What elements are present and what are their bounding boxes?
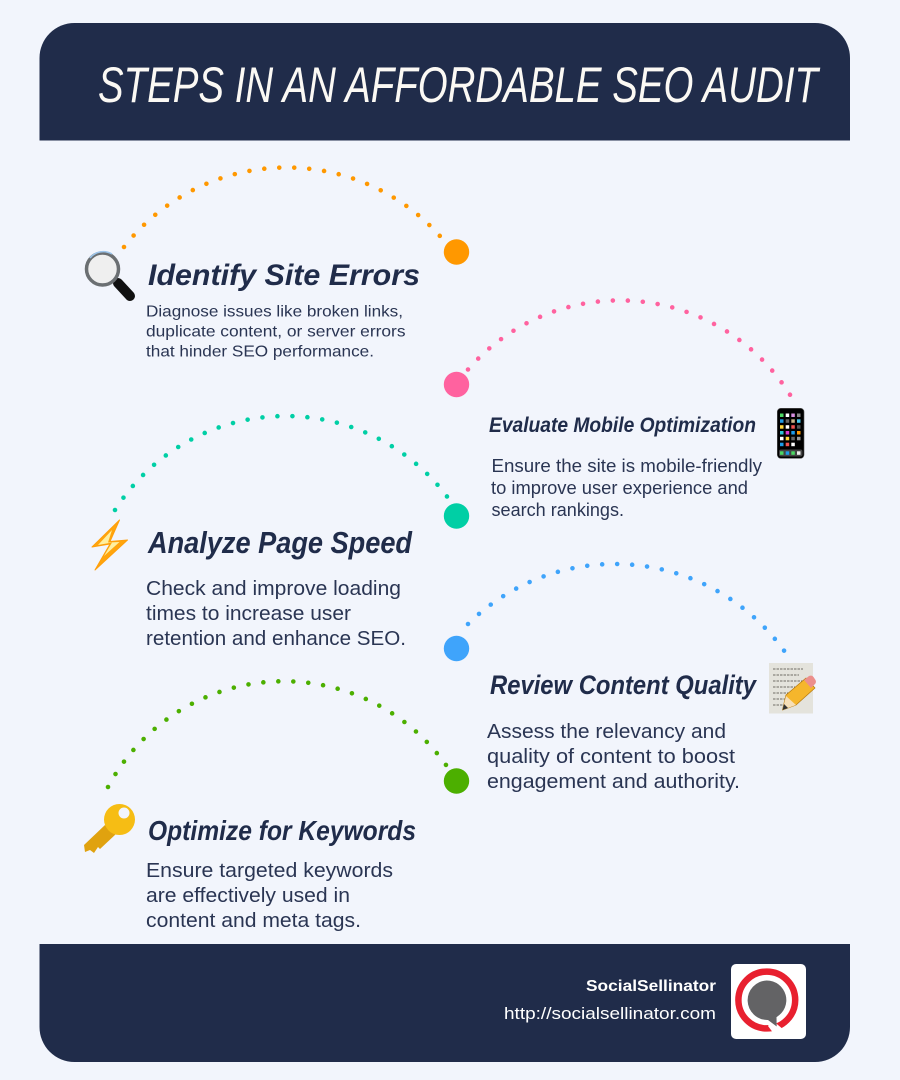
- logo: [731, 964, 806, 1039]
- footer banner: [40, 944, 850, 1062]
- heading: Identify Site Errors: [148, 259, 420, 292]
- description: Diagnose issues like broken links,: [146, 304, 403, 320]
- description: that hinder SEO performance.: [146, 344, 374, 360]
- step 1: identify site errors: [86, 168, 469, 360]
- node: green: [444, 768, 469, 794]
- node: orange: [444, 239, 469, 265]
- header banner: [40, 23, 850, 140]
- step 3: analyze page speed: [92, 416, 469, 650]
- description: [146, 577, 406, 650]
- description: [487, 721, 740, 793]
- icon: memo and pencil: [769, 663, 816, 714]
- description: Assess the relevancy and: [487, 721, 726, 743]
- dotted arc: green: [108, 681, 446, 787]
- description: Ensure the site is mobile-friendly: [492, 456, 762, 476]
- node: teal: [444, 503, 469, 529]
- description: [146, 304, 406, 360]
- description: to improve user experience and: [491, 478, 748, 498]
- heading: Review Content Quality: [490, 670, 758, 700]
- brand name: SocialSellinator: [586, 978, 716, 995]
- icon: lightning bolt: [92, 520, 128, 570]
- icon: smartphone: [777, 408, 804, 458]
- dotted arc: teal: [115, 416, 451, 510]
- description: quality of content to boost: [487, 746, 735, 768]
- description: are effectively used in: [146, 885, 350, 907]
- description: duplicate content, or server errors: [146, 324, 406, 340]
- description: Ensure targeted keywords: [146, 860, 393, 882]
- description: search rankings.: [492, 500, 624, 520]
- dotted arc: pink: [468, 300, 792, 398]
- dotted arc: blue: [468, 564, 785, 652]
- description: Check and improve loading: [146, 577, 401, 600]
- step 4: review content quality: [444, 564, 816, 793]
- node: blue: [444, 636, 469, 661]
- description: content and meta tags.: [146, 910, 361, 932]
- description: [491, 456, 762, 520]
- icon: magnifying glass: [86, 252, 130, 296]
- description: times to increase user: [146, 602, 351, 625]
- dotted arc: orange: [124, 168, 443, 247]
- step 2: evaluate mobile optimization: [444, 300, 804, 520]
- icon: key: [84, 804, 135, 853]
- heading: Optimize for Keywords: [148, 815, 416, 846]
- description: [146, 860, 393, 932]
- description: retention and enhance SEO.: [146, 627, 406, 650]
- step 5: optimize for keywords: [84, 681, 469, 932]
- website url: http://socialsellinator.com: [504, 1005, 716, 1023]
- heading: Evaluate Mobile Optimization: [489, 414, 756, 437]
- node: pink: [444, 372, 469, 397]
- description: engagement and authority.: [487, 771, 740, 793]
- heading: Analyze Page Speed: [147, 525, 413, 560]
